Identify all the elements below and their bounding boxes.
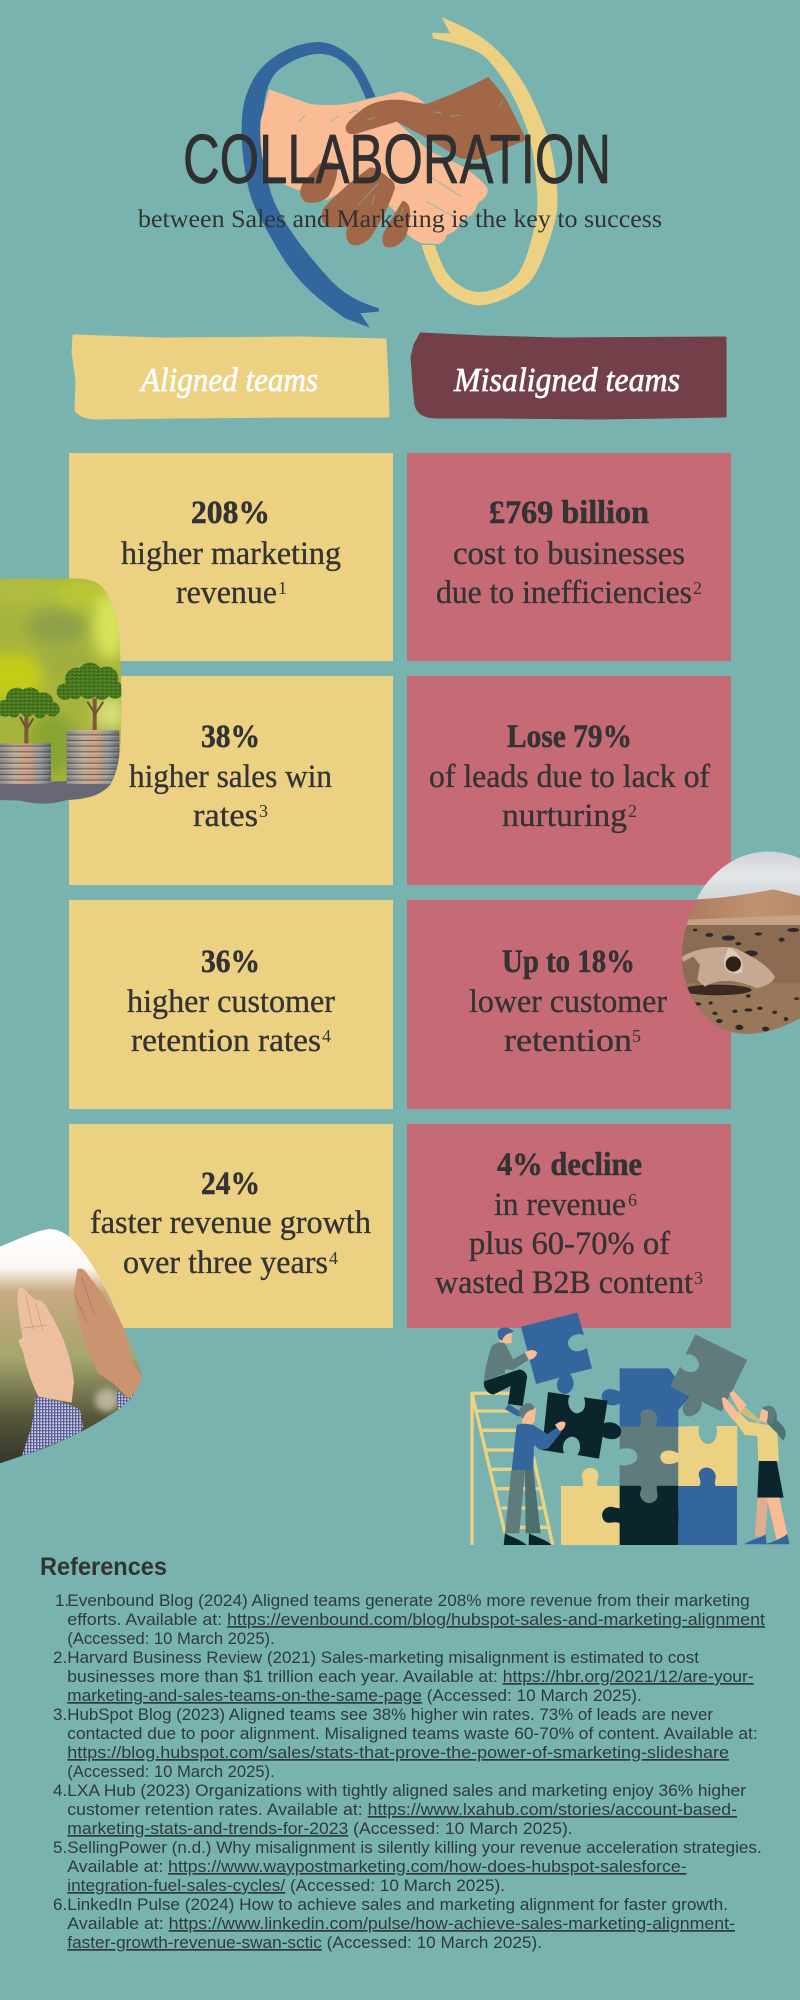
reference 2: businesses more than $1 trillion each year. Available at: https://hbr.org/2021/12/are-your- [67,1667,754,1686]
card: 4% decline [407,1124,731,1328]
right coin stack [67,730,119,784]
reference 1: (Accessed: 10 March 2025). [67,1629,275,1648]
card: 208%: revenue [176,575,277,611]
person: woman [722,1391,790,1544]
reference 4: 4. [53,1781,67,1800]
card: up to 18%: Up to 18% [502,944,635,980]
card: 36%: higher customer [127,984,335,1020]
dune [688,889,800,920]
card: up to 18%: retention [504,1023,632,1059]
label: misaligned teams [412,334,725,418]
piece: yellow mid [660,1426,737,1486]
stones [692,928,799,1031]
card: 36%: 36% [201,944,260,980]
card: 38%: rates [193,798,258,834]
card: 4% decline: 4% decline [497,1147,642,1183]
reference 3: https://blog.hubspot.com/sales/stats-that-prove-the-power-of-smarketing-slideshare [67,1743,729,1762]
card: 4% decline: plus 60-70% of [469,1226,670,1262]
card: 4% decline: in revenue [494,1187,626,1223]
card: lose 79%: Lose 79% [507,719,632,755]
reference 3: contacted due to poor alignment. Misaligned teams waste 60-70% of content. Available at: [67,1724,758,1743]
card: £769 billion: due to inefficiencies [436,575,692,611]
reference 1: efforts. Available at: https://evenbound.com/blog/hubspot-sales-and-marketing-alignment [67,1610,765,1629]
photo: desert skull [677,847,800,1038]
card: 208%: 208% [191,495,270,531]
ribbon: yellow [421,17,558,305]
left coin stack [0,743,51,784]
card: £769 billion: 2 [693,578,702,598]
card: 38%: 3 [259,801,268,821]
right hand [73,1269,142,1398]
piece: flying gray [670,1334,747,1416]
ribbon: blue [242,42,379,328]
reference 4 [53,1781,746,1838]
finger gaps and scratches [298,100,503,220]
reference 6: faster-growth-revenue-swan-sctic (Accessed: 10 March 2025). [67,1933,542,1952]
card: lose 79%: nurturing [502,798,627,834]
reference 3: HubSpot Blog (2023) Aligned teams see 38% higher win rates. 73% of leads are never [67,1705,713,1724]
dark fingers [300,162,337,203]
card: 208%: 1 [278,578,287,598]
piece: gray centre [620,1409,678,1503]
trunks [26,698,95,743]
title: COLLABORATION [183,120,611,198]
card: 38% [69,676,393,885]
card: 208% [69,453,393,661]
card: 24% [69,1124,393,1328]
reference 6: 6. [53,1895,67,1914]
card: 36% [69,900,393,1109]
left cuff [22,1397,83,1457]
illustration: puzzle team [472,1313,790,1545]
left tree foliage [0,687,60,719]
skull shadow [682,985,752,995]
card: up to 18%: lower customer [469,984,667,1020]
right tree foliage [57,663,124,700]
card: 4% decline: wasted B2B content [435,1265,693,1301]
card: lose 79% [407,676,731,885]
piece: yellow base [561,1468,620,1545]
card: lose 79%: 2 [628,801,637,821]
card: 36%: 4 [322,1026,331,1046]
subtitle: between Sales and Marketing is the key to success [138,206,662,233]
card: 36%: retention rates [131,1023,321,1059]
card: £769 billion: cost to businesses [453,536,685,572]
reference 6: Available at: https://www.linkedin.com/pulse/how-achieve-sales-marketing-alignment- [67,1914,735,1933]
reference 4: customer retention rates. Available at: https://www.lxahub.com/stories/account-based- [67,1800,737,1819]
photo: trees growing on coin stacks [0,578,122,804]
reference 6: LinkedIn Pulse (2024) How to achieve sales and marketing alignment for faster growth. [67,1895,728,1914]
card: 4% decline: 6 [628,1190,637,1210]
illustration: handshake inside ribbons [242,17,558,328]
card: 4% decline: 3 [694,1268,703,1288]
right cuff [116,1390,135,1410]
ladder [472,1392,553,1545]
left hand [17,1288,74,1403]
dark hand [346,77,527,160]
label: aligned teams [73,336,388,418]
ground [677,925,800,1038]
reference 1 [55,1591,765,1648]
card: up to 18% [407,900,731,1109]
hands [260,77,527,247]
piece: blue base [678,1468,737,1545]
person: seated man [484,1327,537,1417]
label: misaligned teams: Misaligned teams [453,362,680,399]
heading: references: References [40,1553,167,1581]
reference 2: 2. [53,1648,67,1667]
piece: dark base [602,1486,696,1545]
reference 6 [53,1895,735,1952]
reference 5: Available at: https://www.waypostmarketing.com/how-does-hubspot-salesforce- [67,1857,687,1876]
reference 2: marketing-and-sales-teams-on-the-same-page (Accessed: 10 March 2025). [67,1686,642,1705]
piece: flying blue [521,1313,592,1394]
reference 3: (Accessed: 10 March 2025). [67,1762,275,1781]
reference 1: 1. [55,1591,69,1610]
card: 24%: 4 [329,1248,338,1268]
reference 2: Harvard Business Review (2021) Sales-marketing misalignment is estimated to cost [67,1648,699,1667]
card: 24%: faster revenue growth [90,1205,371,1241]
card: up to 18%: 5 [632,1026,641,1046]
reference 2 [53,1648,754,1705]
card: 38%: 38% [201,719,260,755]
card: £769 billion [407,453,731,661]
ground [0,780,113,804]
card: 208%: higher marketing [121,536,341,572]
reference 5: SellingPower (n.d.) Why misalignment is silently killing your revenue acceleration strategies. [67,1838,762,1857]
reference list [53,1591,765,1952]
card: 24%: over three years [123,1245,328,1281]
photo: hands in prayer [0,1227,147,1467]
reference 5 [53,1838,762,1895]
card: 38%: higher sales win [129,759,332,795]
reference 1: Evenbound Blog (2024) Aligned teams generate 208% more revenue from their marketing [67,1591,750,1610]
card: 24%: 24% [201,1166,260,1202]
reference 3 [53,1705,758,1781]
card: lose 79%: of leads due to lack of [429,759,710,795]
reference 4: marketing-stats-and-trends-for-2023 (Accessed: 10 March 2025). [67,1819,573,1838]
reference 4: LXA Hub (2023) Organizations with tightly aligned sales and marketing enjoy 36% higher [67,1781,746,1800]
person: standing man [504,1403,566,1545]
label: aligned teams: Aligned teams [139,362,318,399]
skull [682,947,775,988]
reference 5: 5. [53,1838,67,1857]
reference 3: 3. [53,1705,67,1724]
card: £769 billion: £769 billion [489,495,649,531]
piece: blue top [602,1368,690,1427]
piece: flying dark [542,1392,621,1459]
reference 5: integration-fuel-sales-cycles/ (Accessed: 10 March 2025). [67,1876,505,1895]
light hand [260,89,488,244]
